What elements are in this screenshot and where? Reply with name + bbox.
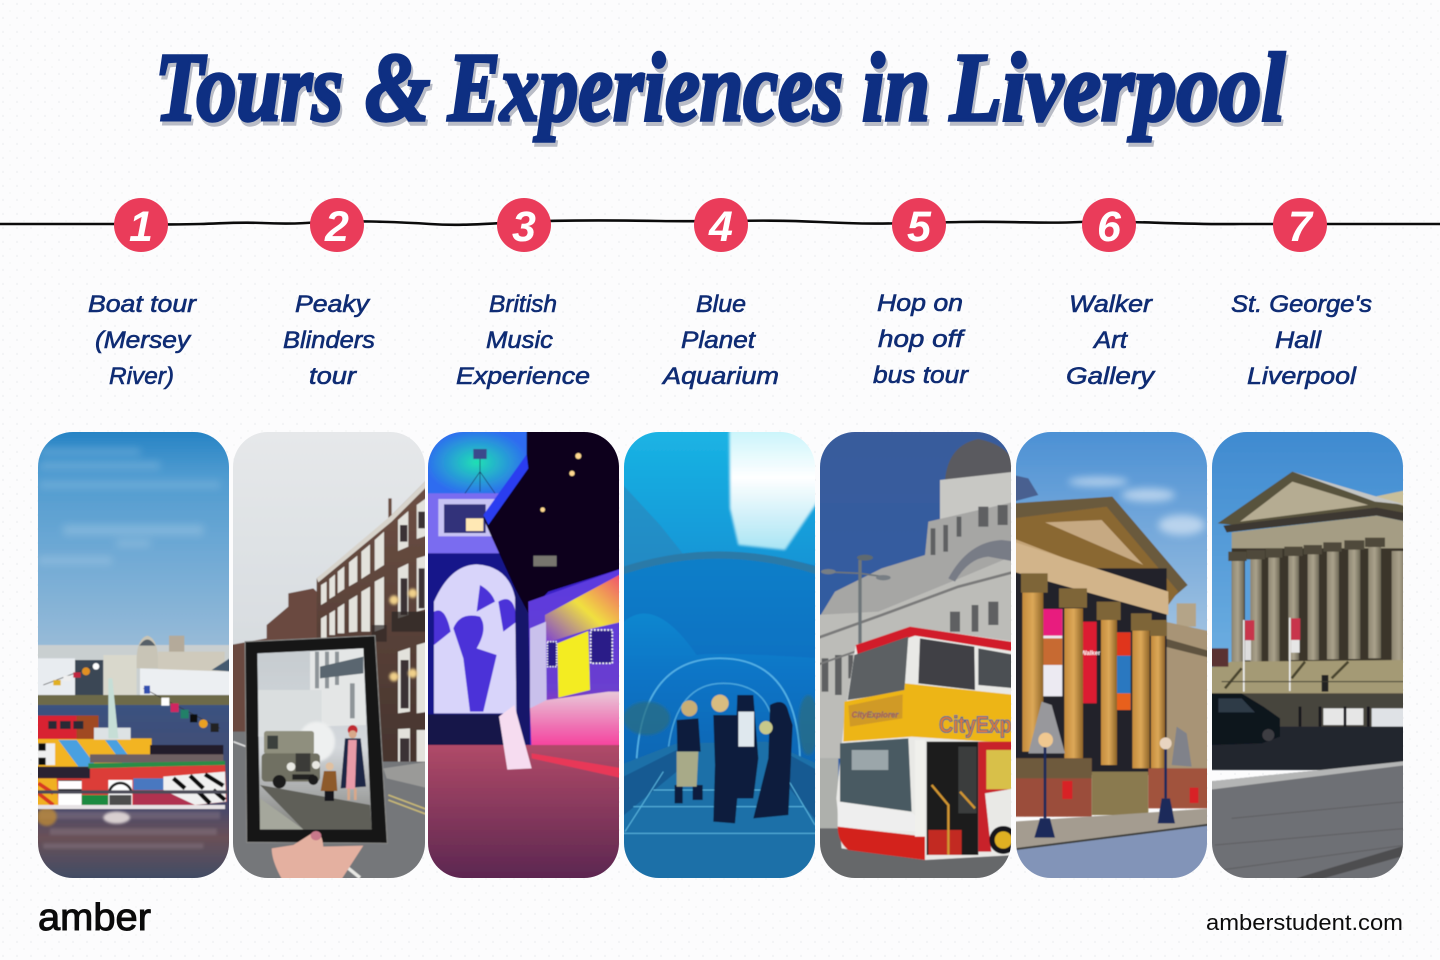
label: st george's hall liverpool xyxy=(1231,291,1372,390)
title: in xyxy=(862,34,930,142)
step 4 number badge xyxy=(694,198,748,252)
label: hop on hop off bus tour xyxy=(873,290,969,389)
title: Liverpool xyxy=(951,38,1288,146)
label: peaky blinders tour: tour xyxy=(309,363,357,390)
title: Tours xyxy=(155,34,343,142)
label: walker art gallery: Gallery xyxy=(1066,363,1156,390)
step 1 number badge xyxy=(114,198,168,252)
step 7 number badge xyxy=(1273,198,1327,252)
logo: amber: amber xyxy=(38,897,151,939)
label: blue planet aquarium xyxy=(661,291,779,390)
label: st george's hall liverpool: St. George's xyxy=(1231,291,1372,318)
title: & xyxy=(365,34,430,142)
label: boat tour: Boat tour xyxy=(88,291,197,318)
title: Experiences xyxy=(447,34,843,142)
step 7 number badge: 7 xyxy=(1288,203,1314,251)
step 5 number badge: 5 xyxy=(907,203,932,251)
label: walker art gallery: Art xyxy=(1092,327,1128,354)
label: british music experience: Experience xyxy=(456,363,590,390)
label: british music experience: Music xyxy=(486,327,553,354)
website url: amberstudent.com xyxy=(1206,910,1403,935)
title: & xyxy=(367,38,432,146)
panel: Walker Art Gallery xyxy=(1013,429,1212,882)
label: peaky blinders tour: Blinders xyxy=(283,327,375,354)
panel: hop on hop off bus xyxy=(817,429,1017,882)
step 4 number badge: 4 xyxy=(708,203,733,251)
label: british music experience: British xyxy=(489,291,557,318)
title: Tours xyxy=(157,38,345,146)
label: boat tour: (Mersey xyxy=(95,327,192,354)
label: walker art gallery: Walker xyxy=(1069,291,1153,318)
title: Liverpool xyxy=(949,34,1286,142)
step 3 number badge xyxy=(497,198,551,252)
label: boat tour: River) xyxy=(109,363,174,390)
step 1 number badge: 1 xyxy=(129,203,153,251)
label: hop on hop off bus tour: bus tour xyxy=(873,362,969,389)
title: Experiences xyxy=(449,38,845,146)
label: blue planet aquarium: Aquarium xyxy=(661,363,779,390)
label: blue planet aquarium: Planet xyxy=(681,327,756,354)
label: peaky blinders tour xyxy=(283,291,375,390)
step 5 number badge xyxy=(892,198,946,252)
label: blue planet aquarium: Blue xyxy=(696,291,746,318)
panel: St George's Hall xyxy=(1208,429,1407,882)
panel: British Music Experience xyxy=(425,429,622,882)
panel: Peaky Blinders tour xyxy=(230,429,430,882)
panel: hop on hop off bus: CityExplorer xyxy=(852,710,899,720)
step 2 number badge: 2 xyxy=(324,203,349,251)
title: in xyxy=(864,38,932,146)
step 3 number badge: 3 xyxy=(512,203,536,251)
label: walker art gallery xyxy=(1066,291,1156,390)
label: peaky blinders tour: Peaky xyxy=(295,291,371,318)
step 6 number badge: 6 xyxy=(1097,203,1122,251)
step 2 number badge xyxy=(310,198,364,252)
panel: Blue Planet Aquarium xyxy=(620,429,820,882)
label: st george's hall liverpool: Hall xyxy=(1275,327,1322,354)
step 6 number badge xyxy=(1082,198,1136,252)
timeline line xyxy=(0,220,1440,225)
panel: hop on hop off bus: CityExp xyxy=(939,711,1012,737)
title xyxy=(155,34,1288,146)
label: hop on hop off bus tour: hop off xyxy=(878,326,966,353)
panel: Walker Art Gallery: Walker xyxy=(1081,651,1101,657)
label: hop on hop off bus tour: Hop on xyxy=(877,290,963,317)
panel: boat on the Mersey xyxy=(35,429,232,882)
label: british music experience xyxy=(456,291,590,390)
label: boat tour xyxy=(88,291,197,390)
label: st george's hall liverpool: Liverpool xyxy=(1247,363,1357,390)
